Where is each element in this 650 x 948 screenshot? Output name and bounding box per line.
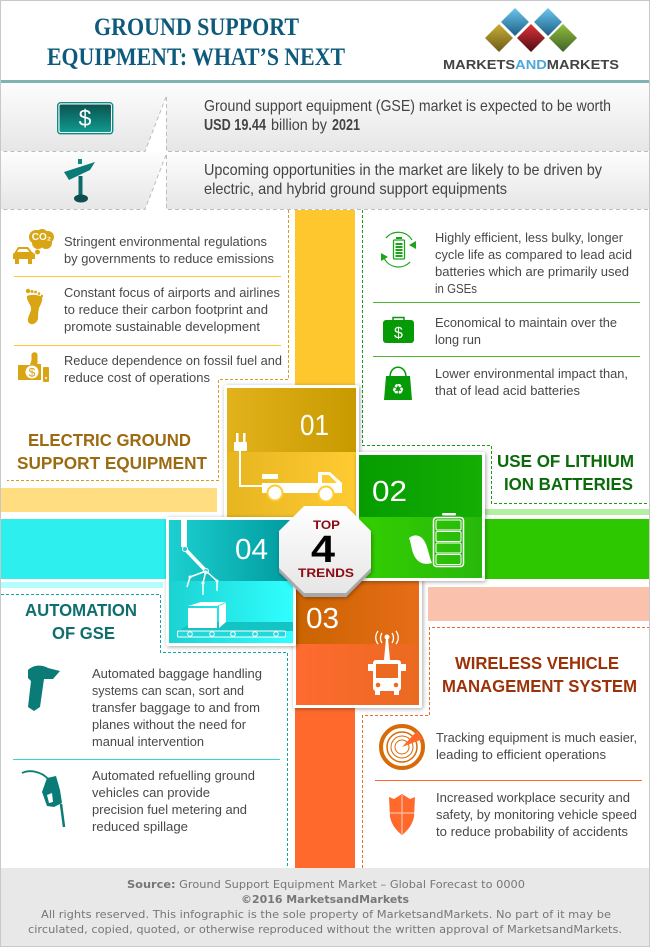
market size text (204, 98, 611, 134)
badge: top 4 trends (279, 506, 371, 597)
badge: top 4 trends: 4 (311, 529, 335, 571)
green band (480, 519, 650, 579)
heading: use of lithium ion batteries: ION BATTERIES (504, 474, 633, 494)
text: baggage handling: transfer baggage to and from (92, 701, 260, 715)
footer: circulated, copied, quoted, or otherwise reproduced without the written approval of MarketsandMarkets. (28, 923, 622, 936)
tile 03: wireless bus: 03 (306, 603, 339, 635)
text: security (436, 791, 637, 839)
text: tracking (436, 731, 637, 762)
salmon band (428, 587, 650, 621)
text: refuelling (92, 769, 255, 834)
heading: use of lithium ion batteries: USE OF LITHIUM (497, 451, 634, 471)
footer: All rights reserved. This infographic is the sole property of MarketsandMarkets. No part of it may be (41, 908, 611, 921)
text: baggage handling (92, 667, 262, 749)
icon: bus with antenna (368, 631, 406, 695)
panel: electric ground support equipment (7, 210, 288, 480)
heading: automation of GSE: AUTOMATION (25, 600, 137, 620)
text: regulations: Stringent environmental regulations (64, 235, 267, 249)
text: regulations: by governments to reduce emissions (64, 252, 274, 266)
opportunities text: Upcoming opportunities in the market are likely to be driven by (204, 162, 602, 179)
text: security: to reduce probability of accidents (436, 825, 628, 839)
icon: recycle bag: ♻ (392, 382, 404, 398)
text: refuelling: Automated refuelling ground (92, 769, 255, 783)
text: efficiency (435, 231, 632, 296)
heading: electric ground support equipment: ELECTRIC GROUND (28, 430, 191, 450)
text: environmental impact: Lower environmental impact than, (435, 367, 628, 381)
icon: battery and leaf (409, 513, 464, 566)
text: baggage handling: systems can scan, sort and (92, 684, 244, 698)
text: efficiency: batteries which are primarily used (435, 265, 629, 279)
panel: market size (0, 83, 650, 152)
text: carbon footprint: to reduce their carbon footprint and (64, 303, 268, 317)
text: efficiency: in GSEs (435, 282, 477, 296)
heading: automation of GSE: OF GSE (52, 623, 115, 643)
opportunities text: electric, and hybrid ground support equipments (204, 181, 507, 198)
logo: MarketsandMarkets: MARKETS AND MARKETS (443, 58, 619, 72)
footer: Source: Ground Support Equipment Market – Global Forecast to 0000 (127, 878, 525, 891)
text: economical: long run (435, 333, 481, 347)
text: economical (435, 316, 617, 347)
pale cyan strip (1, 582, 163, 588)
icon: car and CO2 cloud: CO₂ (32, 232, 51, 243)
heading: electric ground support equipment: SUPPORT EQUIPMENT (17, 453, 207, 473)
icon: footprint (26, 289, 43, 324)
heading: automation of GSE (25, 600, 137, 643)
heading: use of lithium ion batteries (497, 451, 634, 494)
text: fossil fuel: reduce cost of operations (64, 371, 210, 385)
text: baggage handling: manual intervention (92, 735, 204, 749)
footer: ©2016 MarketsandMarkets (241, 893, 409, 906)
badge: top 4 trends: TOP (313, 520, 340, 532)
icon: fuel nozzle (22, 771, 64, 827)
icon: recycle bag (384, 367, 412, 400)
heading: wireless vehicle management system (442, 653, 637, 696)
text: refuelling: vehicles can provide (92, 786, 210, 800)
icon: radar (381, 726, 423, 768)
text: efficiency: Highly efficient, less bulky, longer (435, 231, 623, 245)
logo: MarketsandMarkets (443, 8, 619, 72)
tile 01: electric truck (224, 385, 359, 521)
light yellow band (0, 488, 217, 512)
tile 01: electric truck: 01 (300, 410, 329, 442)
heading: wireless vehicle management system: WIRELESS VEHICLE (455, 653, 619, 673)
text: environmental impact: that of lead acid batteries (435, 384, 580, 398)
footer (0, 868, 650, 946)
icon: barcode scanner (28, 666, 60, 711)
badge: top 4 trends: TRENDS (298, 566, 354, 580)
tile 04: robotic arm: 04 (235, 534, 268, 566)
text: carbon footprint: Constant focus of airports and airlines (64, 286, 280, 300)
panel: wireless vehicle management system (362, 628, 650, 868)
title: EQUIPMENT: WHAT’S NEXT (47, 44, 345, 71)
panel: lithium ion batteries (362, 210, 650, 504)
header rule (0, 80, 650, 83)
text: efficiency: cycle life as compared to lead acid (435, 248, 632, 262)
opportunities text (204, 162, 602, 198)
tile 02: battery and leaf: 02 (372, 476, 407, 508)
vertical orange band (295, 704, 355, 868)
text: refuelling: reduced spillage (92, 820, 188, 834)
text: fossil fuel: Reduce dependence on fossil fuel and (64, 354, 282, 368)
icon: thumbs up with money (18, 352, 49, 382)
text: security: Increased workplace security and (436, 791, 630, 805)
icon: signpost (64, 159, 95, 202)
tile 03: wireless bus (293, 577, 422, 708)
text: carbon footprint: promote sustainable development (64, 320, 261, 334)
panel: automation of GSE (1, 594, 288, 868)
pale green strip (485, 509, 650, 515)
text: carbon footprint (64, 286, 280, 334)
text: baggage handling: planes without the need for (92, 718, 246, 732)
vertical yellow band (295, 210, 355, 387)
text: refuelling: precision fuel metering and (92, 803, 247, 817)
icon: recycling battery (381, 232, 416, 267)
heading: wireless vehicle management system: MANAGEMENT SYSTEM (442, 676, 637, 696)
icon: money briefcase: $ (394, 325, 403, 342)
icon: shield (389, 794, 415, 835)
tile 04: robotic arm (166, 517, 296, 646)
icon: thumbs up with money: $ (29, 366, 36, 380)
cyan band (0, 519, 175, 579)
panel: opportunities (0, 152, 650, 210)
market size text: 2021 (332, 117, 360, 134)
market size text: USD 19.44 (204, 117, 266, 134)
text: tracking: leading to efficient operations (436, 748, 606, 762)
text: tracking: Tracking equipment is much easier, (436, 731, 637, 745)
text: fossil fuel (64, 354, 282, 385)
heading: electric ground support equipment (17, 430, 207, 473)
market size text: billion by (271, 117, 327, 134)
title (47, 14, 345, 71)
text: environmental impact (435, 367, 628, 398)
tile 02: battery and leaf (356, 452, 485, 581)
text: baggage handling: Automated baggage handling (92, 667, 262, 681)
text: security: safety, by monitoring vehicle speed (436, 808, 637, 822)
icon: robotic arm and conveyor (177, 520, 293, 637)
icon: car and CO2 cloud (13, 229, 54, 264)
icon: dollar banknote (58, 103, 113, 134)
icon: dollar banknote: $ (79, 105, 92, 131)
text: economical: Economical to maintain over the (435, 316, 617, 330)
icon: money briefcase (383, 318, 414, 343)
icon: plug and truck (234, 433, 342, 502)
title: GROUND SUPPORT (94, 14, 299, 41)
text: regulations (64, 235, 274, 266)
